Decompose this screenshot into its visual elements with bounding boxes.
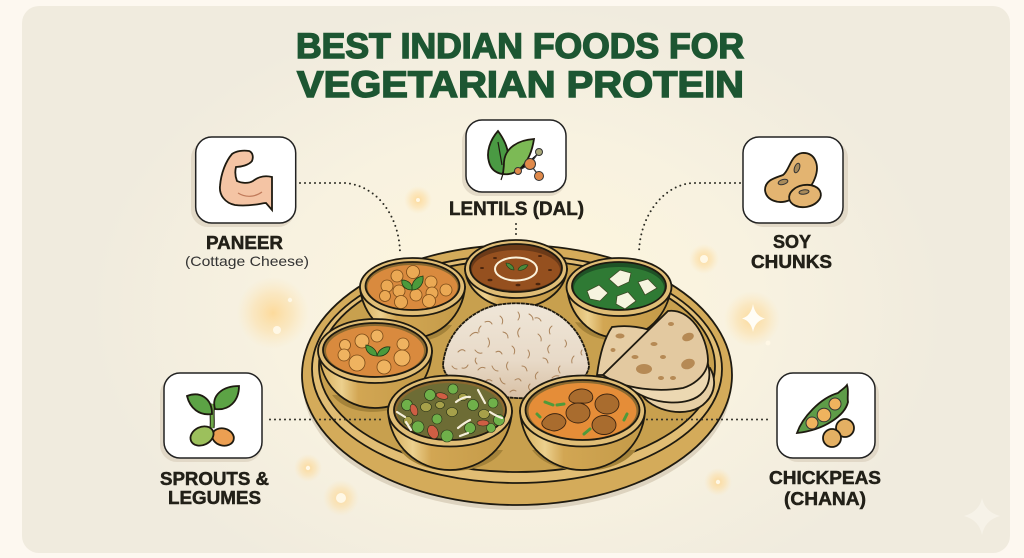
label: sprouts: SPROUTS & (160, 468, 269, 489)
connector: soy (639, 183, 740, 254)
title: BEST INDIAN FOODS FOR (296, 27, 744, 66)
label: paneer (185, 232, 309, 269)
bowl: chickpea curry top left (360, 258, 465, 341)
connector: sprouts (270, 418, 382, 420)
bowl: dal (465, 240, 567, 308)
label: chickpeas: CHICKPEAS (769, 467, 881, 488)
sparkle: bottom right (964, 498, 1000, 535)
label: lentils: LENTILS (DAL) (449, 199, 584, 220)
bowl: chana curry left (318, 319, 432, 412)
label: soy chunks: CHUNKS (751, 251, 832, 272)
card: soy (743, 137, 848, 227)
label: paneer: (Cottage Cheese) (185, 253, 309, 269)
label: sprouts: LEGUMES (168, 487, 261, 508)
connector: paneer (300, 183, 400, 254)
bowl: soy curry (520, 376, 645, 471)
plate thali (302, 245, 732, 510)
card: lentils (462, 120, 566, 196)
label: soy chunks (751, 231, 832, 272)
decorative glows (237, 186, 780, 516)
plate shadow (303, 260, 731, 510)
title (296, 27, 744, 105)
card: sprouts (160, 373, 262, 462)
connector: chickpeas (647, 418, 772, 420)
label: chickpeas: (CHANA) (784, 488, 866, 509)
roti stack (597, 311, 714, 412)
label: soy chunks: SOY (773, 231, 812, 252)
icon: chickpea pod (797, 385, 854, 447)
label: sprouts (160, 468, 269, 508)
label: paneer: PANEER (206, 232, 283, 253)
connector: lentils (515, 224, 517, 238)
icon: soy beans (765, 153, 823, 210)
icon: leaves and molecule (488, 131, 544, 180)
bowl: palak paneer (566, 258, 672, 340)
title: VEGETARIAN PROTEIN (297, 63, 744, 105)
rice mound (443, 303, 589, 398)
bowl: sprouts (388, 376, 512, 471)
icon: sprout (187, 386, 239, 449)
card: paneer (191, 137, 296, 227)
card: chickpeas (777, 373, 879, 462)
icon: muscle arm (220, 151, 272, 210)
plate rim (302, 245, 732, 505)
label: chickpeas (769, 467, 881, 509)
